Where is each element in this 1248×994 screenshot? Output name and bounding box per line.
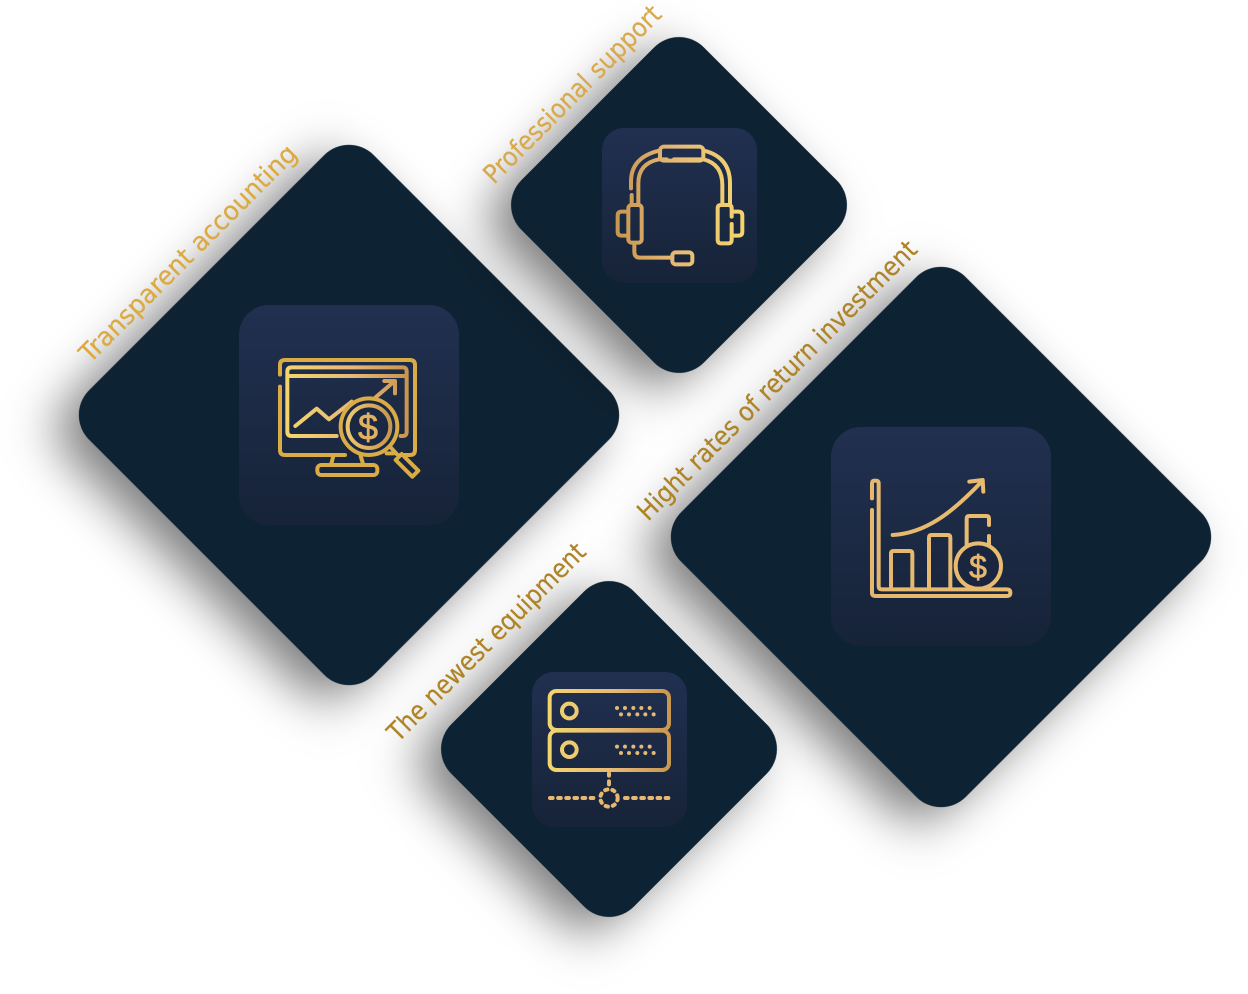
icon: headset (618, 147, 742, 264)
icon: bar chart with coin (872, 480, 1010, 596)
label: Transparent accounting: Transparent accounting (73, 139, 304, 370)
icon: monitor with magnifier and dollar: $ (358, 406, 378, 447)
diamond: newest equipment (427, 567, 791, 931)
diamond: high rates of return (656, 252, 1226, 822)
label: Hight rates of return investment: Hight rates of return investment (632, 235, 924, 527)
icon tile: newest equipment (532, 672, 687, 827)
icon tile: transparent accounting (239, 305, 459, 525)
icon: server rack (550, 691, 669, 807)
panel: newest equipment (381, 537, 791, 931)
label: The newest equipment: The newest equipment (381, 537, 592, 749)
panel: transparent accounting (64, 130, 634, 700)
icon: monitor with magnifier and dollar (280, 360, 418, 477)
panel: high rates of return (632, 235, 1226, 822)
icon tile: high rates of return (831, 427, 1051, 646)
diamond: transparent accounting (64, 130, 634, 700)
diamond: professional support (497, 23, 861, 387)
icon: bar chart with coin: $ (969, 549, 987, 585)
panel: professional support (478, 0, 861, 387)
icon tile: professional support (602, 128, 757, 283)
